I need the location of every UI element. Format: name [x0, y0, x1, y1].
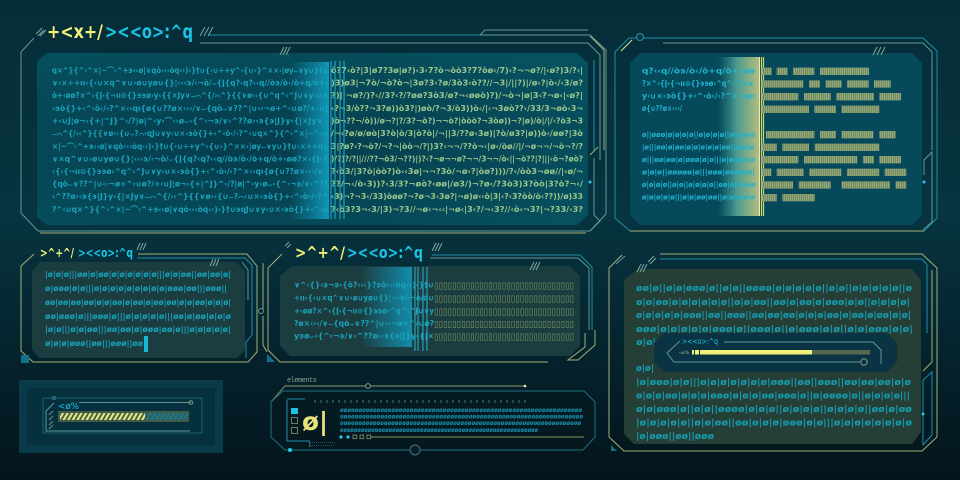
panel 4 tofu text: ▯▯▯▯▯▯▯▯▯▯▯▯▯▯▯▯▯▯▯▯▯▯▯▯▯▯▯▯▯▯▯: [434, 294, 574, 304]
panel 4 tofu text: ▯▯▯▯▯▯▯▯▯▯▯▯▯▯▯▯▯▯▯▯▯▯▯▯▯▯▯▯▯▯▯: [434, 320, 574, 330]
panel 4 cipher text: [294, 280, 434, 342]
panel 1 cipher text green: /¬‹?ø/ø/øò|3?ò|ò/3|ò?ò|/¬||3/??ø‹3ø)|?ò/ø3?|ø))ò‹/øø?|3ò: [331, 129, 583, 139]
panel 3 binary text: ø|øøø|ø|ø|||ø|ø|ø|ø|ø|ø|ø|ø|ø|øøø|øø|||øøø||: [45, 284, 227, 293]
panel 2 fill: [630, 53, 922, 225]
elements binary text: øøøøøøøøøøøøøøøøøøøøøøøøøøøøøøøøøøøøøøøøøøøøøøøøøøøøøøøøøøøøøøøøøø: [340, 414, 583, 420]
elements small caption: ▮ ∙∙∙∙ ∙∙∙∙∙∙∙∙: [309, 440, 335, 444]
panel 4 fill: [280, 266, 580, 356]
elements frame: [271, 391, 595, 455]
panel 2 cipher text: ?×^‹{ǀ‹{¬ıı⊙{}϶϶ø›^q^‹^J∪∨: [642, 79, 754, 88]
progress stripes empty: [145, 413, 188, 420]
panel 3 title: [40, 246, 133, 260]
panel 1 cipher text cyan: ?^‹∪q×^}{^›^×|~⌒‹^+϶‹‹ø|∨qò‹‹‹òq‹›)‹}†∪϶qJ∪∨y‹∪×‹϶ò{}+‹^‹ò: [52, 204, 328, 215]
panel 3 fill: [32, 262, 245, 358]
panel: cipher to tofu text: [267, 242, 595, 362]
panel 1 cipher text cyan: ∨‹×÷+ıı‹{‹∪×q^∨∪›ø∪yø∪{}¦‹‹‹϶/‹¬ò/⌣{ǀ{q?‹q?‹‹q//ò϶/ò‹/ò+q/ò+‹: [52, 78, 328, 88]
panel 4 cipher text: +ıı‹{‹∪×q^∨∪›ø∪yø∪{}¦‹‹‹϶/‹¬ò/ò∪: [294, 294, 434, 302]
panel 1 cipher text green: )3)ø3|¬7ò/¬ò?ò¬|3ø?3‹?ø/3ò3‹ò??//¬3|/||?)|/ø‹?|ò‹/‹3/ø?: [331, 78, 583, 88]
panel 1 vertical lines: [331, 61, 344, 219]
panel 3 title: ><<o>:^q: [78, 246, 133, 260]
panel 1 cipher text green: ‹?¬3/ò??¬3?ø))ò3?|)øò/?¬3/ò3))ò‹/|‹¬3øò??‹/33/3¬øò‹3¬: [331, 104, 583, 114]
panel 3 binary text: |ø|ø|||ø|ø|øø|||øø|øø|ø|øøø|øø|ø|||ø|ø|ø|ø|ø|: [45, 325, 231, 334]
panel 2 binary text: ø|ø|ø||øøøøø|ø|||øøø|øøøø|ø|: [642, 168, 755, 178]
panel 4 tofu text: [434, 282, 574, 342]
popup knob: [861, 359, 867, 365]
panel 4 cipher text: y϶ø⌣‹{^‹¬϶/∨‹^??ø›‹϶{϶|J}y‹{|×: [294, 332, 434, 342]
progress stripes filled: [60, 413, 145, 420]
panel 2 binary text: |ø|||øø|ø|øø|ø|ø|ø|ø|ø|øø||ø|ø|ø: [642, 144, 754, 152]
progress panel outer: [19, 380, 223, 453]
progress track: [58, 411, 189, 422]
panel 1 cipher text green: )ò¬??¬/ò))/ø¬?|?/3?¬ò?)¬¬ò?|òòò?¬3òø))¬?|ø)/ò|/|/‹?ò3¬3: [331, 116, 583, 126]
panel 5 binary text: øø|ø||ø|ø|øøø|ø||ø|ø||øøøø|ø|ø|ø|ø|ø||ø|ø||ø|ø|ø|ø|ø||ø: [636, 284, 912, 294]
panel 3 binary text: ø|ø|ø|øøø||øø|||øøø||øø: [45, 339, 143, 348]
progress panel inner: [27, 388, 215, 445]
panel: binary text with progress popup: [609, 254, 937, 451]
panel 3 title: >^+^/: [40, 246, 74, 260]
progress popup: [654, 333, 897, 372]
panel 5 binary text: ø|ø|ø|ø|ø|øøø||øø||øøø||øø|øø|øø|ø|ø|ø|øø|ø|øø|ø|øø|ø|ø|: [636, 311, 911, 321]
panel 5 fill: [624, 269, 921, 444]
panel 1 cipher text green: ‹3)¬?¬3‹/33)òøø?¬?ø¬3‹3ø?|¬ø)ø‹‹ò|3|‹?‹3?òò/ò‹??))/ø)33: [331, 192, 583, 202]
panel 4 cipher text: +‹øø?×^‹{ǀ‹{¬ıı⊙{}϶϶ø›^q^‹^J∪∨y: [294, 306, 434, 316]
panel 1 fill: [37, 53, 588, 225]
panel 1 cipher text cyan: +‹∪J¦ø¬‹{+|^J}^‹/?|ø|^‹y›⌒‹›ø⌣‹{^‹¬϶/∨‹^??ø›‹϶{϶|J}y‹{|×Jy∨⌣: [52, 116, 328, 126]
panel 2 redaction bars: [762, 68, 906, 201]
panel 1 cipher text cyan: ⌣⌒^{/›‹^}{{∨ø‹‹{∪⌣?⌒‹qJ∪∨y‹∪×‹϶ò{}+‹^‹ò‹/‹?^‹∪q×^}{^›^×|~^‹∪: [52, 129, 328, 139]
panel 1 cipher text cyan: ò+‹øø?×^‹{ǀ‹{¬ıı⊙{}϶϶ø›y‹{{×Jy∨⌣⌒^{/›‹^}{{∨ø‹‹{∪^q^‹^J∪∨y‹∪×: [52, 91, 328, 100]
popup background: [654, 333, 897, 372]
panel 1 cipher text cyan: ‹^??ø›‹϶{϶|J}y‹{|×Jy∨⌣⌒^{/›‹^}{{∨ø‹‹{∪⌣?⌒‹∪×‹϶ò{}+‹^‹ò‹/‹?^: [52, 192, 328, 202]
panel 4 title: ><<o>:^q: [347, 243, 423, 262]
panel 1 frame: [21, 27, 606, 233]
panel 1 title: ><<o>:^q: [105, 21, 193, 43]
panel 4 tofu text: ▯▯▯▯▯▯▯▯▯▯▯▯▯▯▯▯▯▯▯▯▯▯▯▯▯▯▯▯▯▯▯: [434, 282, 574, 292]
panel 2 binary text: ø|||øø|øø|ø|øøø|ø|ø|||ø|ø|ø|ø|ø: [642, 156, 755, 165]
panel 1 cipher text green: ?‹ò3/|3?ò|òò?)ò‹‹3ø|¬¬?3ò/¬ø‹?|òø?)))/?‹/òò3¬øø//|‹ø/¬: [331, 167, 583, 177]
panel 1 cipher text green: 3|?ø?‹?¬ò?/¬?¬|òò¬/?|)3?‹¬¬/??ò¬‹|ø‹/òø//|/¬ø¬¬/¬ò¬?/?: [331, 142, 583, 152]
panel 1 cipher text green: [331, 66, 583, 215]
popup title: ><<o>:^q: [682, 337, 718, 346]
popup progress label: ‹ø%: [679, 350, 690, 356]
elements small caption: [309, 440, 335, 448]
elements small caption: ▮ ∙∙∙∙ ∙∙∙∙∙∙∙: [309, 444, 334, 448]
panel 1 cipher text green: ?‹ò3?3¬‹3/|3)¬?3//¬ø‹¬‹‹|¬ø‹|3‹?/¬‹3?//‹ò‹¬3?|¬?33/‹3?: [331, 205, 583, 215]
progress frame: [43, 396, 202, 433]
panel 5 binary text: |ø|ø|ø|ø|ø||ø|ø|øø||øø|ø|ø|ø|øøø|ø|ø|||ø|ø|ø|ø|ø|ø|ø|ø: [636, 418, 912, 428]
panel 1 cipher text cyan: ‹϶ò{}+‹^‹ò‹/‹?^×‹‹qı{ø{∪??ø×‹›‹/∨⌣{qò⌣∨??^|∪‹‹¬ø+^‹∪ø?/+‹∪J: [52, 104, 328, 114]
popup frame: [667, 341, 860, 362]
panel 4 title: [295, 243, 423, 262]
panel 2 frame: [615, 34, 937, 231]
elements top rule: [271, 384, 526, 402]
elements icon checkboxes: [291, 408, 298, 434]
elements caption: elements: [287, 377, 317, 385]
panel 5 binary text: |ø|øøø||øø||øøø: [636, 432, 714, 442]
panel 2 vertical lines: [758, 57, 760, 216]
panel 2 binary text: ø|ø|ø|ø|ø|||ø|ø|øø|øø||ø|ø|ø|ø|ø: [642, 194, 755, 202]
panel 4 vertical lines: [415, 267, 427, 351]
panel 4 gradient band: [360, 267, 412, 347]
panel 5 binary text: [636, 284, 913, 442]
panel 1 cipher text cyan: {qò⌣∨??^|∪‹‹¬ø+^‹∪ø?/+‹∪J¦ø¬‹{+|^J}^‹/?|ø|^‹y›ø⌣‹{^‹¬϶/∨‹^??: [52, 180, 328, 190]
panel: text and redaction bars: [615, 34, 937, 231]
panel 5 frame: [609, 254, 937, 451]
panel 3 binary text: øø|øø|øø|øø|ø|ø|øø|ø|øø|ø|øø|øø|ø|ø|øø|ø|ø|ø|: [45, 298, 231, 307]
panel 5 binary text: øøø|ø|ø|ø|ø|ø|øøø|ø||øøø|ø||ø|øøø|ø|ø||ø|ø|øøø|ø|ø|: [636, 325, 913, 335]
panel 2 cipher text: ø{∪??ø×‹›‹/: [642, 104, 682, 113]
panel 2 cipher text: q?‹‹q//ò϶/ò‹/ò+q/ò+‹øø: [642, 66, 755, 76]
panel 1 cipher text cyan: q×^}{^›^×|~⌒‹^+϶‹‹ø|∨qò‹‹‹òq‹›)‹}†∪{‹∪÷+y^‹{∪›}^××‹|øy⌣∨y∪}†∪: [52, 65, 328, 76]
panel 2 gradient band: [718, 57, 759, 216]
panel 4 cipher text: ∨^‹{}‹϶¬϶‹{ò?‹‹‹}?϶ò‹‹‹òq‹›)‹}†∪: [294, 280, 434, 290]
popup progress ticks: [692, 350, 699, 354]
panel 4 tofu text: ▯▯▯▯▯▯▯▯▯▯▯▯▯▯▯▯▯▯▯▯▯▯▯▯▯▯▯▯▯▯▯: [434, 308, 574, 318]
panel 2 yellow marker: [762, 57, 764, 216]
panel 1 cipher text cyan: ∨×q^∨∪›ø∪yø∪{}¦‹‹‹϶/‹¬ò/⌣{ǀ{q?‹q?‹‹q//ò϶/ò‹/ò+q/ò+‹øø?×‹{ǀ‹{: [52, 154, 328, 164]
elements pager: [339, 435, 584, 439]
panel 3 cursor: [144, 336, 148, 352]
panel 2 binary text: ø||øøø|ø|ø|ø|ø||ø|ø|ø|ø||ø|ø|ø|ø: [642, 131, 755, 140]
panel 5 binary text: ø|ø|ø|øø|ø|ø|ø|øøø|ø|ø|ø|øø|øøø|ø||ø|øøøø|ø||ø|ø|ø|ø|||: [636, 392, 910, 402]
panel: text decoding large: [21, 21, 606, 233]
panel 2 binary text: ø|ø|ø|ø||ø|ø||ø|ø|ø|ø||øø|ø|ø|ø|ø: [642, 181, 755, 190]
panel 2 cipher text: y‹∪×‹϶ò{}+‹^‹ò‹/‹?^×‹‹qıı: [642, 92, 755, 100]
panel: hazard progress bar: [19, 380, 223, 453]
panel 4 frame: [267, 242, 595, 362]
panel 1 title: +<x+/: [47, 21, 103, 43]
elements symbol: ø|: [302, 407, 328, 436]
panel 4 cipher text: ?ø×‹›‹/∨⌣{qò⌣∨??^|∪‹‹¬ø+^‹∪ø?: [294, 319, 434, 329]
panel 1 title: [47, 21, 193, 43]
panel 1 cipher text cyan: ×|~⌒‹^+϶‹‹ø|∨qò‹‹‹òq‹›)‹}†∪{‹∪÷+y^‹{∪›}^××‹|øy⌣∨y∪}†∪‹×÷+ıı{: [52, 141, 328, 152]
panel 1 cipher text cyan: [52, 65, 328, 215]
panel 1 cipher text cyan: ‹{‹{¬ıı⊙{}϶϶ø›^q^‹^J∪∨y‹∪×‹϶ò{}+‹^‹ò‹/‹?^×‹‹qı{ø{∪??ø×‹›‹/∨⌣: [52, 167, 328, 176]
progress label: <ø%: [58, 402, 79, 412]
panel 4 tofu text: ▯▯▯▯▯▯▯▯▯▯▯▯▯▯▯▯▯▯▯▯▯▯▯▯▯▯▯▯▯▯▯: [434, 332, 574, 342]
popup progress fill: [700, 350, 812, 354]
panel: elements: [271, 377, 595, 455]
panel 2 binary text: [642, 131, 755, 202]
panel 5 binary text: ø|ø|: [636, 338, 656, 348]
panel 1 gradient band: [290, 62, 329, 219]
panel 5 binary text: |ø|øøø|ø|ø|||ø|ø|ø|ø|ø|ø|ø|øøø||øø||øøø||øø|øø|øø|ø|ø: [636, 378, 911, 388]
panel 5 binary text: ø|ø|øø|ø|ø|ø|ø|ø|ø||ø|ø|øø||øø|ø|øø|ø|øøø|ø|ø||ø|ø|ø|ø|: [636, 298, 910, 308]
panel 3 binary text: [45, 270, 231, 348]
panel 1 cipher text green: )/?)?/?||///??¬ò3/¬??)|)?‹?¬ø¬¬ø?¬¬/3¬¬/ò‹||¬ò??|?|||‹ò¬?øò?: [331, 154, 583, 164]
panel 1 cipher text green: ò?7‹ò?|3|ø7?3ø|ø?)‹3‹7?ò¬òò3?7?òø‹/7)‹?¬¬ø?/|‹ø?)3/?‹|: [331, 66, 583, 76]
panel: small binary text: [21, 243, 267, 363]
panel 3 binary text: |ø|ø|ø|||øø|ø|øø|ø|ø|ø|ø|ø|ø|||ø|ø|øø||øø|øø|ø|: [45, 270, 231, 279]
panel 1 cipher text green: ?)||¬ø?/)?‹//3?‹?/?øø?3ò3/ø?¬‹øøò)?)/¬ò¬|ø|3‹?¬ø‹|‹ø?|: [331, 91, 583, 101]
panel 5 binary text: ø|ø|: [636, 364, 654, 374]
elements binary text: [340, 407, 583, 434]
popup progress track: [812, 350, 870, 354]
panel 3 frame: [21, 243, 267, 363]
panel 4 title: >^+^/: [295, 243, 345, 262]
panel 3 binary text: øø|øøø|ø|||øøø|ø|||ø|ø|ø|ø|ø|||øø|ø|øø|ø|ø|ø: [45, 312, 231, 321]
elements binary text: øøøøøøøøøøøøøøøøøøøøøøøøøøøøøøøøøøøøøøøøøøøøøøøøøøøøøøøøøøøøøøøøøø: [340, 407, 582, 414]
panel 2 cipher text: [642, 66, 755, 113]
elements binary text: øøøøøøøøøøøøøøøøøøøøøøøøøøøøøøøøøøøøøøøøøøøøøøøøøøøøøøøøø: [340, 427, 538, 434]
elements binary text: øøøøøøøøøøøøøøøøøøøøøøøøøøøøøøøøøøøøøøøøøøøøøøøøøøøøøøøøøøøøøøøøøø: [340, 420, 581, 427]
panel 5 binary text: ø|ø|øøø|ø||ø|ø||øøøø|ø|ø|ø||ø|ø|ø|ø||ø|ø|ø|ø||øø|ø|øø: [636, 405, 912, 415]
panel 1 cipher text green: ??/¬‹/ò‹3))?‹3/3?¬øò?‹øø|/ø3/)¬?ø‹/?3ò3)3?òò|3?ò?¬‹/: [331, 180, 583, 190]
